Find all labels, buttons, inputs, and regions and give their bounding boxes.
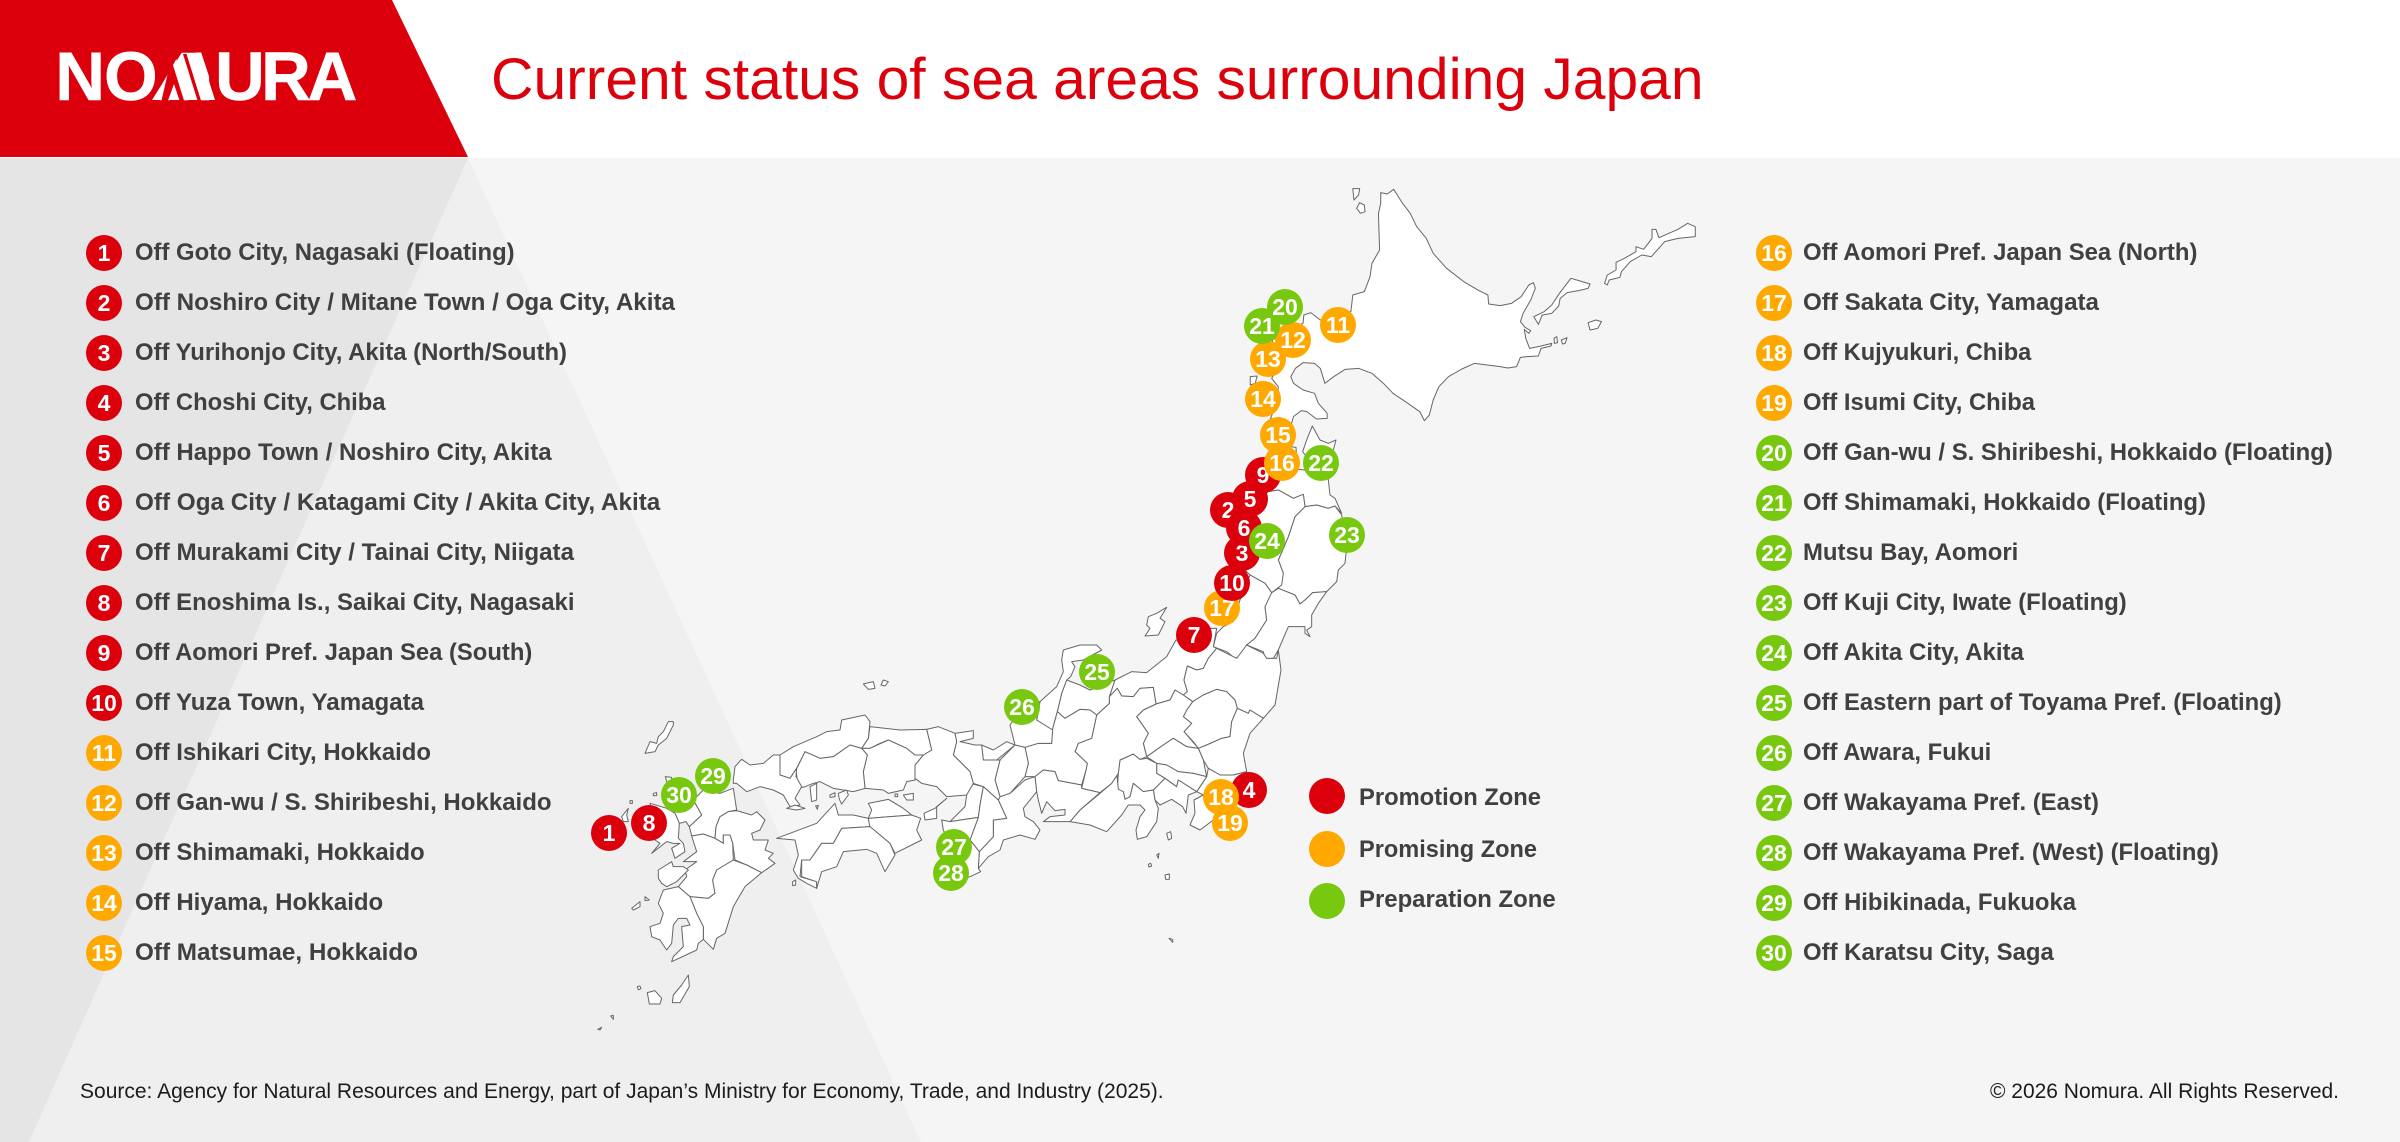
marker 19 [1212, 805, 1248, 841]
item 30 [1756, 935, 2054, 971]
item 26 [1756, 735, 1991, 771]
item 5: Off Happo Town / Noshiro City, Akita [135, 439, 552, 466]
right list: sites 16 to 30 [1756, 235, 2333, 971]
marker 16 [1264, 445, 1300, 481]
marker 1 [591, 815, 627, 851]
item 20: Off Gan-wu / S. Shiribeshi, Hokkaido (Floating) [1803, 439, 2333, 466]
item 12 [86, 785, 552, 821]
item 21: 21 [1761, 490, 1787, 516]
item 11: 11 [92, 740, 116, 766]
marker 7: 7 [1188, 622, 1200, 648]
item 10: 10 [91, 690, 117, 716]
marker 17 [1204, 590, 1240, 626]
marker 29: 29 [700, 763, 726, 789]
item 28: 28 [1761, 840, 1787, 866]
item 30: 30 [1761, 940, 1787, 966]
item 17: Off Sakata City, Yamagata [1803, 289, 2100, 316]
marker 15 [1260, 417, 1296, 453]
marker 22 [1303, 445, 1339, 481]
item 9 [86, 635, 532, 671]
marker 28: 28 [938, 860, 964, 886]
item 16: 16 [1761, 240, 1787, 266]
item 24 [1756, 635, 2025, 671]
item 24: Off Akita City, Akita [1803, 639, 2025, 666]
item 18: Off Kujyukuri, Chiba [1803, 339, 2032, 366]
item 4: 4 [98, 390, 111, 416]
left list: sites 1 to 15 [86, 235, 676, 971]
item 12: Off Gan-wu / S. Shiribeshi, Hokkaido [135, 789, 552, 816]
marker 2: 2 [1222, 497, 1234, 523]
item 8: Off Enoshima Is., Saikai City, Nagasaki [135, 589, 574, 616]
item 24: 24 [1761, 640, 1787, 666]
copyright: © 2026 Nomura. All Rights Reserved. [1990, 1080, 2339, 1103]
item 23: 23 [1761, 590, 1787, 616]
item 9: Off Aomori Pref. Japan Sea (South) [135, 639, 532, 666]
logo: NOMURA: NOMURA [55, 38, 357, 115]
legend: promising zone [1309, 831, 1537, 867]
marker 14: 14 [1250, 386, 1276, 412]
marker 10 [1214, 565, 1250, 601]
marker 20: 20 [1272, 294, 1298, 320]
marker 16: 16 [1269, 450, 1295, 476]
map: Chubu and Kanto [1025, 607, 1281, 942]
item 13 [86, 835, 425, 871]
marker 27 [936, 829, 972, 865]
item 25: Off Eastern part of Toyama Pref. (Floating) [1803, 689, 2282, 716]
item 25: 25 [1761, 690, 1787, 716]
source note: Source: Agency for Natural Resources and Energy, part of Japan’s Ministry for Economy, Trade, and Industry (2025). [80, 1080, 1164, 1103]
item 15: 15 [91, 940, 117, 966]
item 20: 20 [1761, 440, 1787, 466]
item 17: 17 [1761, 290, 1787, 316]
item 13: 13 [91, 840, 117, 866]
item 7: 7 [98, 540, 110, 566]
marker 6 [1226, 510, 1262, 546]
item 6: 6 [98, 490, 110, 516]
item 1: Off Goto City, Nagasaki (Floating) [135, 239, 515, 266]
marker 5 [1232, 481, 1268, 517]
item 14 [86, 885, 383, 921]
marker 14 [1245, 381, 1281, 417]
item 2: Off Noshiro City / Mitane Town / Oga City, Akita [135, 289, 676, 316]
item 2 [86, 285, 676, 321]
marker 15: 15 [1265, 422, 1291, 448]
legend: preparation zone [1309, 883, 1556, 919]
item 17 [1756, 285, 2100, 321]
item 21 [1756, 485, 2206, 521]
item 29: 29 [1761, 890, 1787, 916]
item 8 [86, 585, 574, 621]
item 16: Off Aomori Pref. Japan Sea (North) [1803, 239, 2197, 266]
item 22: 22 [1761, 540, 1787, 566]
legend [1309, 778, 1556, 919]
marker 1: 1 [603, 820, 616, 846]
item 7 [86, 535, 575, 571]
item 6: Off Oga City / Katagami City / Akita City, Akita [135, 489, 661, 516]
map: Tohoku [1213, 426, 1347, 658]
item 3 [86, 335, 567, 371]
item 19: 19 [1761, 390, 1787, 416]
item 19: Off Isumi City, Chiba [1803, 389, 2036, 416]
marker 21: 21 [1249, 313, 1275, 339]
item 19 [1756, 385, 2036, 421]
marker 25 [1079, 654, 1115, 690]
map: Western Honshu, Shikoku and Kyushu [598, 680, 1053, 1030]
item 26: 26 [1761, 740, 1787, 766]
legend: promotion zone [1309, 778, 1541, 814]
item 16 [1756, 235, 2197, 271]
item 4 [86, 385, 386, 421]
item 7: Off Murakami City / Tainai City, Niigata [135, 539, 575, 566]
marker 26 [1004, 689, 1040, 725]
item 14: 14 [91, 890, 117, 916]
item 8: 8 [98, 590, 111, 616]
item 27 [1756, 785, 2099, 821]
marker 7 [1176, 617, 1212, 653]
marker 9: 9 [1257, 462, 1269, 488]
marker 2 [1210, 492, 1246, 528]
item 10 [86, 685, 425, 721]
marker 11 [1320, 307, 1356, 343]
item 27: Off Wakayama Pref. (East) [1803, 789, 2099, 816]
item 29 [1756, 885, 2077, 921]
item 23: Off Kuji City, Iwate (Floating) [1803, 589, 2127, 616]
item 1: 1 [98, 240, 111, 266]
marker 19: 19 [1217, 810, 1243, 836]
item 5 [86, 435, 552, 471]
item 10: Off Yuza Town, Yamagata [135, 689, 425, 716]
marker 17: 17 [1209, 595, 1235, 621]
marker 20 [1267, 289, 1303, 325]
marker 5: 5 [1244, 486, 1257, 512]
marker 12: 12 [1280, 327, 1306, 353]
map markers [591, 289, 1365, 891]
item 29: Off Hibikinada, Fukuoka [1803, 889, 2077, 916]
header: red logo panel [0, 0, 468, 157]
item 6 [86, 485, 661, 521]
item 18 [1756, 335, 2032, 371]
marker 28 [933, 855, 969, 891]
item 11: Off Ishikari City, Hokkaido [135, 739, 431, 766]
item 30: Off Karatsu City, Saga [1803, 939, 2054, 966]
item 27: 27 [1761, 790, 1787, 816]
item 22 [1756, 535, 2018, 571]
marker 27: 27 [941, 834, 967, 860]
marker 24 [1249, 523, 1285, 559]
item 11 [86, 735, 431, 771]
map of Japan [598, 189, 1695, 1030]
marker 4 [1231, 772, 1267, 808]
marker 6: 6 [1238, 515, 1250, 541]
legend: preparation zone: Preparation Zone [1359, 886, 1556, 913]
marker 25: 25 [1084, 659, 1110, 685]
marker 21 [1244, 308, 1280, 344]
marker 26: 26 [1009, 694, 1035, 720]
marker 8 [631, 805, 667, 841]
marker 30: 30 [666, 782, 692, 808]
marker 29 [695, 758, 731, 794]
marker 12 [1275, 322, 1311, 358]
item 22: Mutsu Bay, Aomori [1803, 539, 2018, 566]
item 12: 12 [91, 790, 117, 816]
item 26: Off Awara, Fukui [1803, 739, 1991, 766]
marker 24: 24 [1254, 528, 1280, 554]
marker 22: 22 [1308, 450, 1334, 476]
item 9: 9 [98, 640, 110, 666]
marker 3 [1224, 535, 1260, 571]
marker 30 [661, 777, 697, 813]
marker 23 [1329, 517, 1365, 553]
legend: promotion zone: Promotion Zone [1359, 784, 1541, 811]
marker 8: 8 [643, 810, 656, 836]
marker 18: 18 [1208, 784, 1234, 810]
marker 3: 3 [1236, 540, 1248, 566]
marker 11: 11 [1326, 312, 1350, 338]
marker 23: 23 [1334, 522, 1360, 548]
item 23 [1756, 585, 2127, 621]
title: Current status of sea areas surrounding Japan [491, 47, 1704, 112]
marker 18 [1203, 779, 1239, 815]
item 1 [86, 235, 515, 271]
item 21: Off Shimamaki, Hokkaido (Floating) [1803, 489, 2206, 516]
item 15 [86, 935, 418, 971]
marker 13 [1250, 341, 1286, 377]
item 18: 18 [1761, 340, 1787, 366]
marker 9 [1245, 457, 1281, 493]
item 25 [1756, 685, 2282, 721]
marker 13: 13 [1255, 346, 1281, 372]
item 3: Off Yurihonjo City, Akita (North/South) [135, 339, 567, 366]
item 20 [1756, 435, 2333, 471]
item 28 [1756, 835, 2219, 871]
item 5: 5 [98, 440, 111, 466]
item 13: Off Shimamaki, Hokkaido [135, 839, 425, 866]
marker 4: 4 [1243, 777, 1256, 803]
map: Hokkaido and northern islands [1250, 189, 1695, 423]
item 14: Off Hiyama, Hokkaido [135, 889, 383, 916]
marker 10: 10 [1219, 570, 1245, 596]
item 15: Off Matsumae, Hokkaido [135, 939, 418, 966]
item 4: Off Choshi City, Chiba [135, 389, 386, 416]
item 2: 2 [98, 290, 110, 316]
item 3: 3 [98, 340, 110, 366]
legend: promising zone: Promising Zone [1359, 836, 1537, 863]
item 28: Off Wakayama Pref. (West) (Floating) [1803, 839, 2219, 866]
